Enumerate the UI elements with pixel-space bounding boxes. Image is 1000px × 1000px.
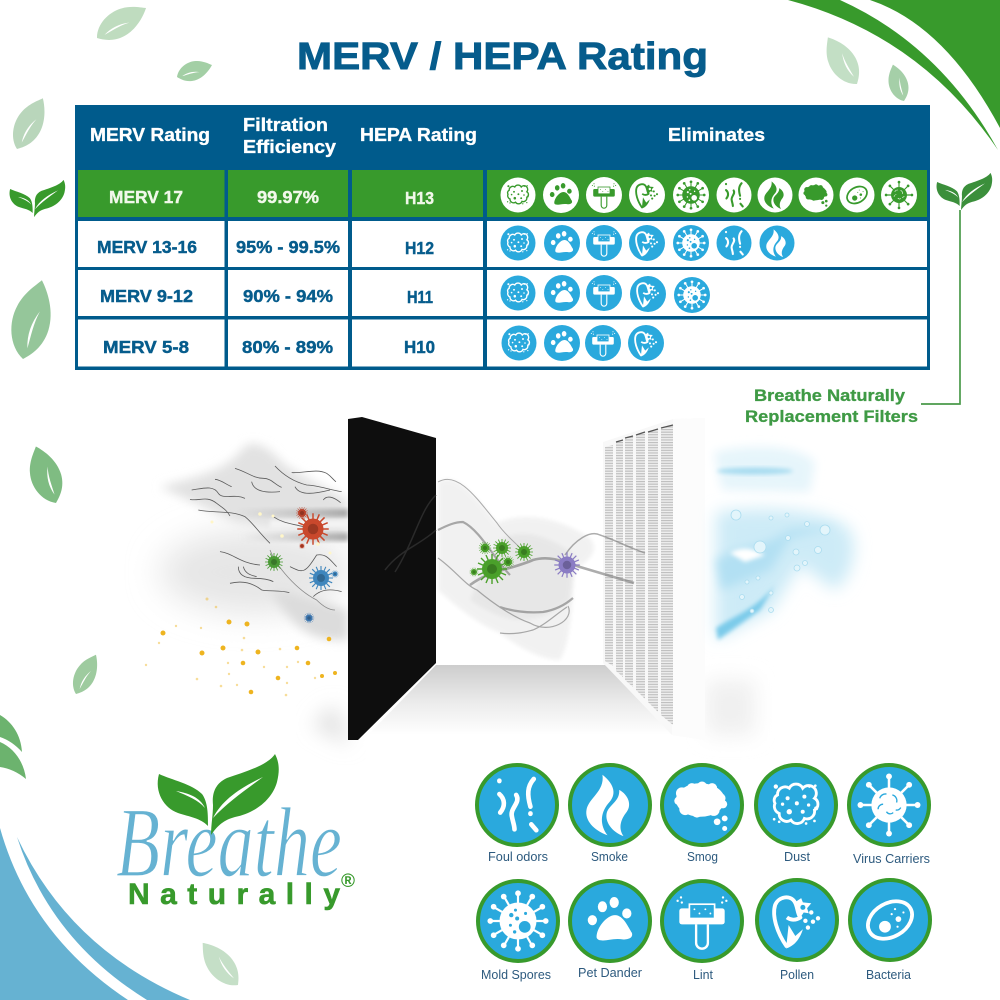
illustration: floor shadow	[312, 665, 755, 745]
illustration: dirty air cloud	[145, 444, 350, 696]
header: MERV Rating: MERV Rating	[90, 125, 210, 145]
icons: MERV 17 row	[500, 177, 917, 213]
title: MERV / HEPA Rating	[297, 36, 708, 78]
icon: Foul odors	[477, 765, 557, 845]
header: Filtration Efficiency: Efficiency	[243, 137, 336, 157]
80% - 89%: 80% - 89%	[242, 337, 333, 357]
callout: Breathe Naturally Replacement Filters: Replacement Filters	[745, 408, 918, 426]
header: Filtration Efficiency	[243, 115, 336, 157]
label: Bacteria: Bacteria	[866, 967, 912, 982]
logo word: Naturally: Naturally	[128, 878, 340, 911]
icons: MERV 9-12 row	[500, 275, 710, 313]
corner swoosh: bottom left	[0, 828, 190, 1000]
90% - 94%: 90% - 94%	[243, 286, 333, 306]
panel: rating table	[75, 105, 930, 370]
header: Eliminates: Eliminates	[668, 125, 765, 145]
pollen particles	[145, 598, 337, 696]
hair and fibres	[190, 466, 342, 610]
label: Pollen: Pollen	[780, 967, 814, 982]
icon: Lint	[662, 881, 742, 961]
icons: MERV 13-16 row	[500, 225, 794, 261]
header: Filtration Efficiency: Filtration	[243, 115, 328, 135]
logo leaves	[158, 754, 279, 835]
illustration: black carbon filter	[348, 417, 436, 740]
MERV 13-16: MERV 13-16	[97, 237, 197, 257]
highlighted row: cells	[78, 170, 927, 217]
panel: contaminant legend	[477, 765, 930, 982]
99.97%: 99.97%	[257, 187, 319, 207]
H12: H12	[405, 238, 434, 258]
label: Lint: Lint	[693, 967, 713, 982]
label: Smog: Smog	[687, 849, 718, 864]
icon: Mold Spores	[478, 881, 558, 961]
label: Dust: Dust	[784, 849, 810, 864]
germs in air stream	[470, 539, 580, 584]
row: MERV 5-8 cells	[78, 320, 927, 366]
icons: MERV 5-8 row	[502, 325, 664, 361]
label: Foul odors: Foul odors	[488, 849, 548, 864]
connector arrow to table row	[921, 210, 960, 404]
callout: Breathe Naturally Replacement Filters	[745, 387, 918, 426]
MERV 5-8: MERV 5-8	[103, 337, 189, 357]
H11: H11	[407, 287, 433, 307]
icon: Pollen	[757, 880, 837, 960]
icon: dark green leaf pair, left	[10, 180, 65, 217]
label: Virus Carriers: Virus Carriers	[853, 851, 930, 866]
icon: Virus Carriers	[849, 765, 929, 845]
icon: Bacteria	[850, 880, 930, 960]
icon: Pet Dander	[570, 881, 650, 961]
logo: Breathe Naturally	[116, 754, 355, 911]
row: MERV 9-12 cells	[78, 270, 927, 316]
icon: dark green leaf pair, right	[937, 173, 992, 210]
callout: Breathe Naturally Replacement Filters: Breathe Naturally	[754, 387, 906, 405]
MERV 17: MERV 17	[109, 187, 183, 207]
illustration: air stream between filters	[438, 479, 645, 660]
label: Mold Spores: Mold Spores	[481, 967, 551, 982]
MERV 9-12: MERV 9-12	[100, 286, 193, 306]
header: HEPA Rating: HEPA Rating	[360, 125, 477, 145]
row: MERV 13-16 cells	[78, 221, 927, 267]
illustration: white HEPA filter	[603, 418, 705, 740]
H10: H10	[404, 337, 435, 357]
illustration: clean air mist	[714, 447, 854, 640]
icon: Smoke	[570, 765, 650, 845]
registered mark: ®	[341, 871, 355, 892]
corner swoosh: top right	[788, 0, 1000, 150]
logo word: Breathe: Breathe	[116, 787, 342, 898]
germs in dirty air	[210, 507, 339, 623]
95% - 99.5%: 95% - 99.5%	[236, 237, 340, 257]
label: Pet Dander: Pet Dander	[578, 965, 643, 980]
H13: H13	[405, 188, 434, 208]
icon: Dust	[756, 765, 836, 845]
table frame and header	[75, 105, 930, 370]
icon: Smog	[662, 765, 742, 845]
label: Smoke: Smoke	[591, 849, 628, 864]
